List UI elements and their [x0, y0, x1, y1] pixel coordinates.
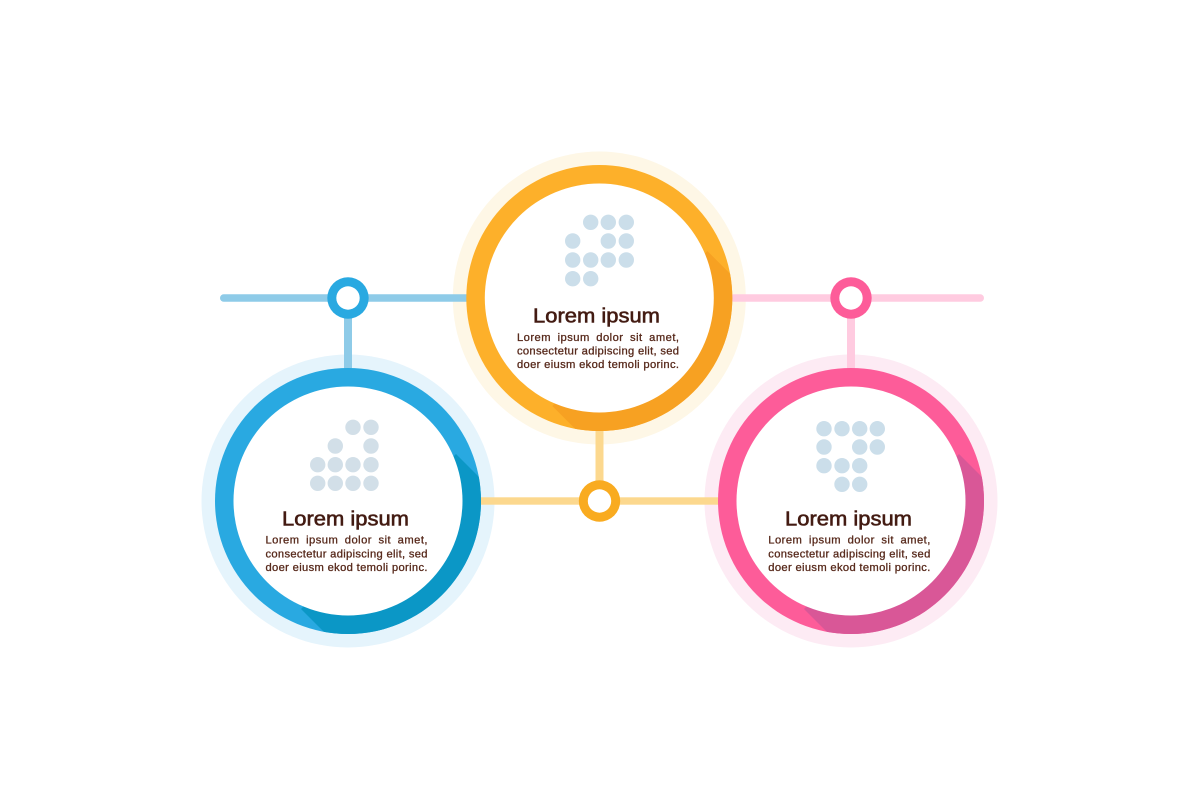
text block: right: consectetur adipiscing elit, sed	[768, 548, 930, 560]
text block: left: Lorem ipsum dolor sit amet,	[266, 534, 428, 546]
panel: center circle	[466, 165, 732, 431]
node: blue	[327, 277, 369, 319]
text block: center: consectetur adipiscing elit, sed	[517, 345, 679, 357]
text block: right	[768, 534, 930, 574]
panel: right circle	[718, 368, 984, 634]
text block: center: Lorem ipsum dolor sit amet,	[517, 332, 679, 344]
text block: center	[517, 332, 679, 371]
text block: left: doer eiusm ekod temoli porinc.	[266, 562, 428, 574]
ring: orange	[466, 165, 732, 431]
ring: blue	[215, 368, 481, 634]
text block: left: consectetur adipiscing elit, sed	[266, 548, 428, 560]
panel: left circle	[215, 368, 481, 634]
icon: left dot pattern	[310, 420, 379, 491]
icon: right dot pattern	[816, 421, 885, 492]
heading: left: Lorem ipsum	[282, 508, 409, 531]
halo: left circle	[202, 354, 494, 648]
heading: center: Lorem ipsum	[533, 305, 660, 328]
text block: center: doer eiusm ekod temoli porinc.	[517, 359, 679, 371]
ring: pink	[718, 368, 984, 634]
halo: right circle	[704, 354, 998, 648]
halo: center circle	[453, 152, 746, 444]
heading: right: Lorem ipsum	[785, 508, 912, 531]
node: pink	[830, 277, 872, 319]
connector: pink line	[730, 294, 984, 370]
text block: right: Lorem ipsum dolor sit amet,	[768, 534, 930, 546]
connector: orange line	[478, 428, 720, 505]
connector: blue line	[220, 294, 470, 370]
text block: right: doer eiusm ekod temoli porinc.	[768, 562, 930, 574]
text block: left	[266, 534, 428, 574]
node: orange	[579, 480, 620, 522]
icon: center dot pattern	[565, 215, 634, 286]
